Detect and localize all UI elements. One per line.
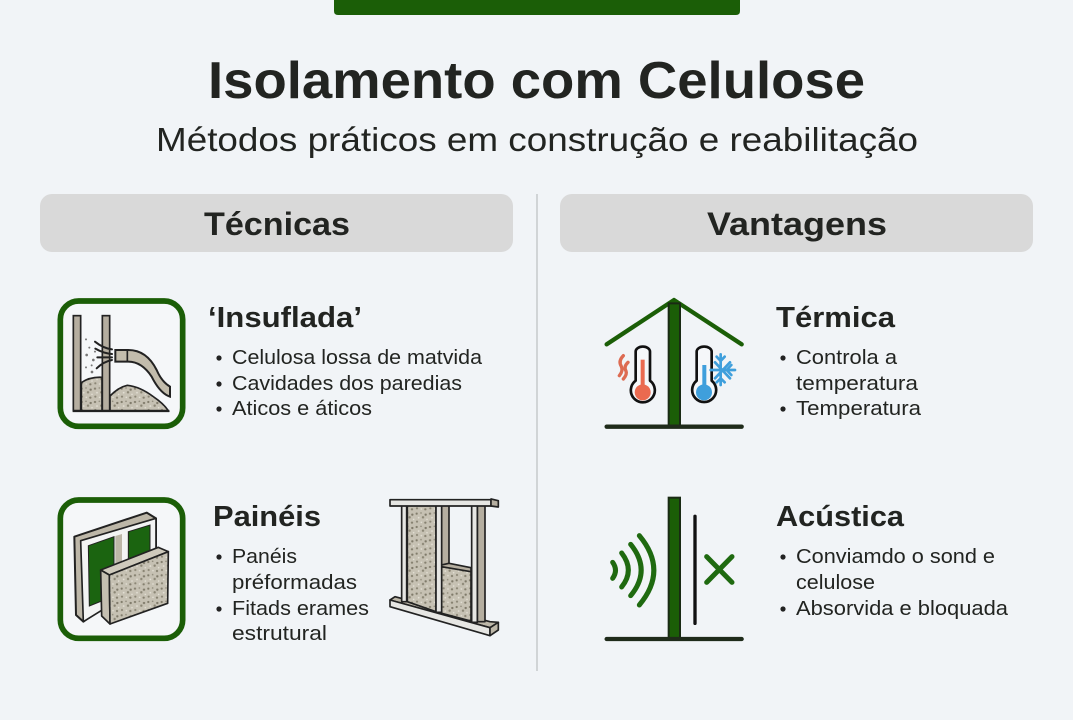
text block: acústica list — [780, 545, 1009, 620]
panel: técnicas heading — [40, 194, 513, 252]
text block: painéis list: Fitads erames — [232, 597, 369, 620]
heading: painéis: Painéis — [213, 501, 321, 533]
icon: acoustic wall — [607, 498, 742, 639]
text block: acústica list: Absorvida e bloquada — [796, 597, 1009, 620]
text block: insuflada list — [216, 346, 483, 420]
icon: thermal house — [607, 300, 742, 427]
title: Isolamento com Celulose — [208, 52, 865, 110]
text block: insuflada list: Cavidades dos paredias — [232, 372, 462, 395]
heading: insuflada: ‘Insuflada’ — [208, 302, 362, 334]
panel: técnicas heading: Técnicas — [204, 206, 350, 242]
text block: acústica list: Conviamdo o sond e — [796, 545, 995, 568]
icon: blown cellulose — [60, 301, 183, 426]
text block: térmica list — [780, 346, 922, 420]
text block: térmica list: temperatura — [796, 372, 919, 395]
heading: térmica: Térmica — [776, 302, 896, 334]
icon: panels — [60, 500, 183, 638]
text block: painéis list: estrutural — [232, 622, 327, 645]
top green bar — [334, 0, 740, 15]
panel: vantagens heading: Vantagens — [707, 206, 887, 242]
text block: painéis list: préformadas — [232, 571, 357, 594]
text block: painéis list: Panéis — [232, 545, 297, 568]
text block: insuflada list: Celulosa lossa de matvida — [232, 346, 483, 369]
text block: painéis list — [216, 545, 369, 645]
text block: térmica list: Temperatura — [796, 397, 922, 420]
text block: acústica list: celulose — [796, 571, 875, 594]
panel: vantagens heading — [560, 194, 1033, 252]
subtitle: Métodos práticos em construção e reabilitação — [156, 121, 918, 158]
text block: térmica list: Controla a — [796, 346, 898, 369]
heading: acústica: Acústica — [776, 501, 905, 533]
text block: insuflada list: Aticos e áticos — [232, 397, 372, 420]
icon: timber frame — [390, 499, 498, 636]
